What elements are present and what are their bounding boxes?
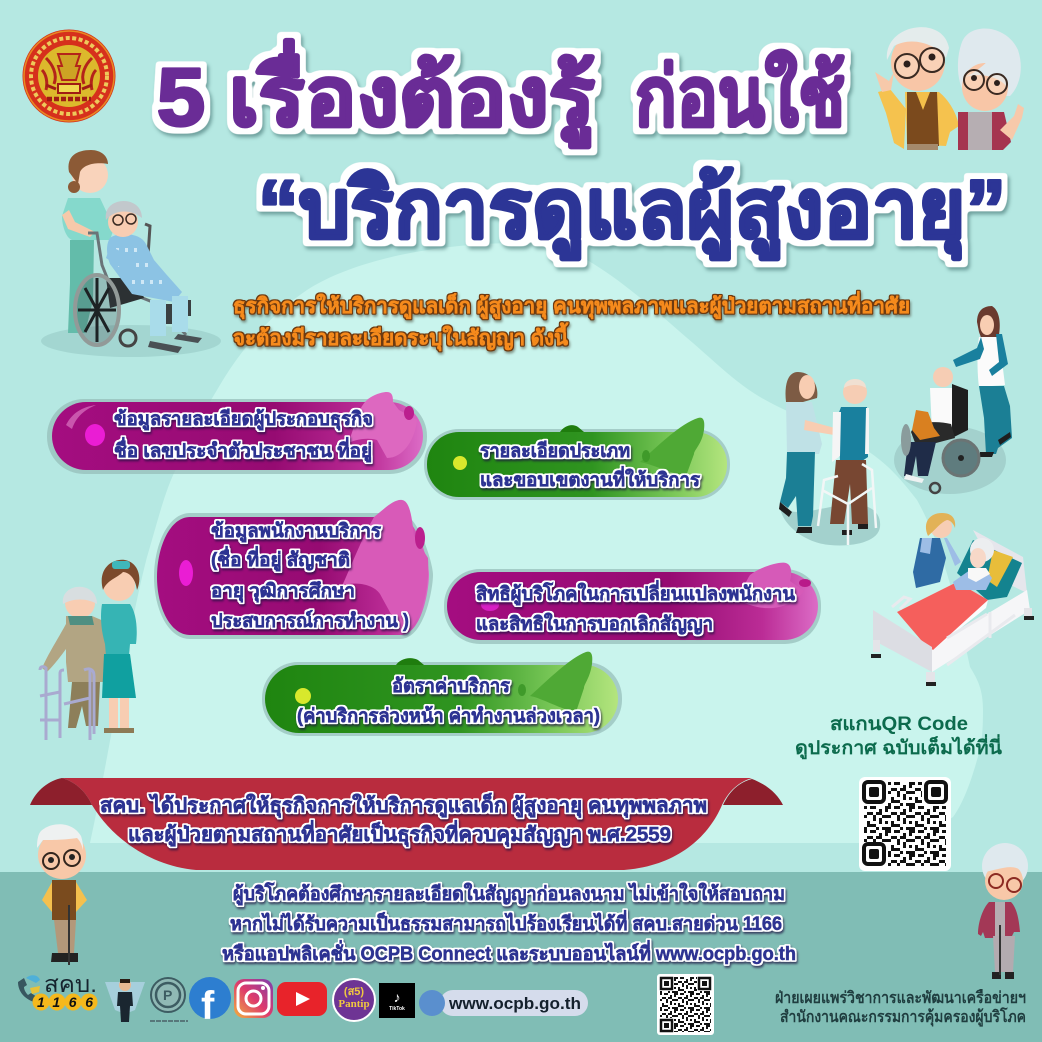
icon: caregiver with man in wheelchair and cat: [894, 306, 1012, 494]
text: ประสบการณ์การทำงาน ): [211, 610, 409, 632]
logo: OCPB circle: [150, 978, 188, 1021]
text: สิทธิผู้บริโภคในการเปลี่ยนแปลงพนักงาน: [476, 580, 795, 606]
icon: caregiver helping man with walker: [779, 372, 880, 545]
icon: caregiver and patient in bed: [871, 513, 1034, 684]
logo: OCPB hotline 1166: สคบ.: [44, 971, 97, 997]
icon: pantip: (ส5): [344, 986, 364, 998]
icon: pantip: Pantip: [338, 998, 370, 1010]
icon: elderly couple: [875, 27, 1024, 150]
red ribbon banner: [30, 778, 783, 870]
intro line 1: ธุรกิจการให้บริการดูแลเด็ก ผู้สูงอายุ คนทุพพลภาพและผู้ป่วยตามสถานที่อาศัย: [233, 290, 910, 320]
line 1: ผู้บริโภคต้องศึกษารายละเอียดในสัญญาก่อนลงนาม ไม่เข้าใจให้สอบถาม: [233, 882, 785, 906]
icon: tiktok: [379, 983, 415, 1018]
intro line 2: จะต้องมีรายละเอียดระบุในสัญญา ดังนี้: [233, 322, 569, 352]
logo: OCPB circle: P: [163, 987, 172, 1003]
text: สคบ. ได้ประกาศให้ธุรกิจการให้บริการดูแลเด็ก ผู้สูงอายุ คนทุพพลภาพ: [100, 792, 707, 819]
logo: OCPB hotline 1166: [18, 971, 98, 1010]
qr caption: [795, 714, 1002, 760]
line 2: หากไม่ได้รับความเป็นธรรมสามารถไปร้องเรียนได้ที่ สคบ.สายด่วน 1166: [230, 910, 782, 935]
icon: tiktok: TikTok: [389, 1006, 405, 1012]
icon: facebook: f: [201, 984, 215, 1028]
text: และขอบเขตงานที่ให้บริการ: [480, 466, 701, 491]
title part two: ก่อนใช้: [635, 50, 845, 143]
intro text: [233, 290, 910, 352]
text: ชื่อ เลขประจำตัวประชาชน ที่อยู่: [114, 437, 372, 463]
icon: nurse supporting elderly woman with walker: [40, 560, 139, 740]
bottom band: [0, 872, 1042, 1042]
text: (ค่าบริการล่วงหน้า ค่าทำงานล่วงเวลา): [297, 705, 600, 727]
logo: OCPB hotline 1166: 1166: [37, 994, 93, 1010]
icon: pantip: [333, 979, 375, 1021]
title line 1: [157, 39, 845, 148]
logo: seal: [22, 30, 116, 122]
website pill: [419, 990, 588, 1016]
text: (ชื่อ ที่อยู่ สัญชาติ: [211, 546, 350, 572]
line 2: ดูประกาศ ฉบับเต็มได้ที่นี่: [795, 734, 1002, 760]
text: และผู้ป่วยตามสถานที่อาศัยเป็นธุรกิจที่ควบคุมสัญญา พ.ศ.2559: [128, 819, 671, 848]
logo: person mascot: [105, 979, 145, 1022]
text: อายุ วุฒิการศึกษา: [211, 580, 355, 603]
title line 2: “บริการดูแลผู้สูงอายุ”: [258, 164, 1006, 260]
pill 3: staff details: [154, 500, 433, 639]
credit text: [775, 989, 1026, 1028]
icon: tiktok: ♪: [394, 989, 400, 1005]
icon: facebook: [189, 977, 231, 1028]
icon: nurse pushing woman in wheelchair: [41, 150, 221, 357]
text: ข้อมูลพนักงานบริการ: [211, 520, 382, 543]
line 3: หรือแอปพลิเคชั่น OCPB Connect และระบบออนไลน์ที่ www.ocpb.go.th: [222, 940, 796, 965]
line 1: สแกนQR Code: [830, 714, 968, 735]
website pill: www.ocpb.go.th: [448, 995, 581, 1013]
text: อัตราค่าบริการ: [392, 676, 511, 697]
light blob background shape: [90, 243, 983, 843]
icon: elderly woman with cane: [978, 843, 1028, 979]
pill 5: service rates: [262, 652, 622, 736]
icon: instagram: [234, 979, 273, 1018]
pill 4: consumer rights: [444, 563, 821, 644]
text: รายละเอียดประเภท: [480, 440, 630, 462]
pill 2: service scope: [424, 418, 730, 500]
title part one: 5 เรื่องต้องรู้: [157, 39, 595, 148]
pill 1: operator details: [47, 392, 427, 474]
text: และสิทธิในการบอกเลิกสัญญา: [476, 612, 713, 635]
footer advice text: [222, 882, 796, 965]
icon: elderly man with cane: [37, 824, 87, 965]
text: ข้อมูลรายละเอียดผู้ประกอบธุรกิจ: [114, 408, 373, 431]
qr code large: [859, 777, 951, 871]
qr code small: [657, 974, 714, 1035]
icon: youtube: [277, 982, 327, 1016]
